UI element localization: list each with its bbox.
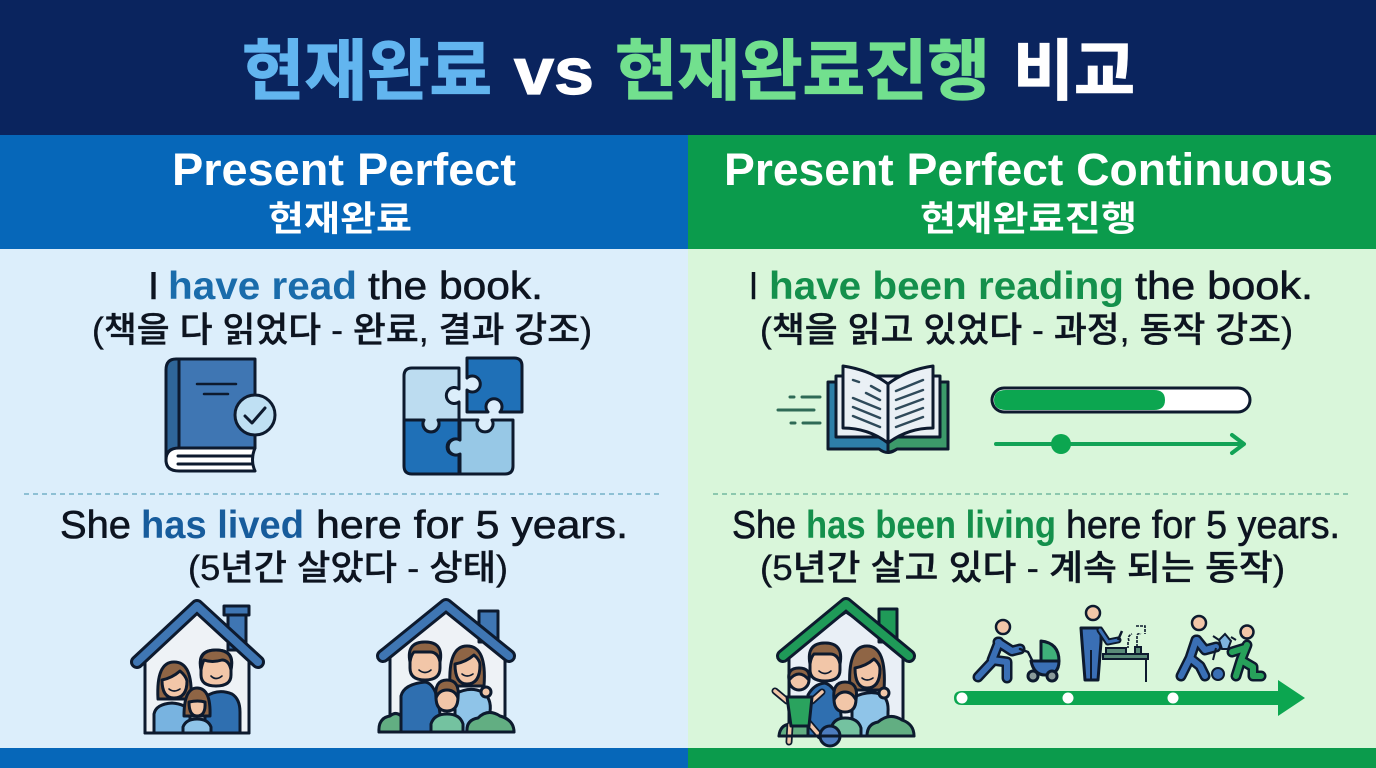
icon: people playing with baby bbox=[1181, 616, 1261, 680]
woman bbox=[450, 646, 484, 686]
example sentence: has been living: here for 5 years. bbox=[1066, 504, 1340, 547]
icon: house with family 1 bbox=[137, 606, 258, 733]
example sentence: have read: the book. bbox=[368, 265, 543, 308]
icon: person cooking bbox=[1081, 606, 1148, 682]
ball bbox=[820, 726, 840, 746]
divider right bbox=[713, 493, 1351, 495]
example sentence: has lived: here for 5 years. bbox=[316, 504, 628, 547]
example sentence: have read bbox=[148, 265, 543, 308]
background: title band bbox=[0, 0, 1376, 135]
korean gloss: have been reading: (책을 읽고 있었다 - 과정, 동작 강조) bbox=[760, 311, 1293, 350]
panel heading: present perfect continuous bbox=[688, 135, 1376, 249]
child bbox=[431, 714, 463, 732]
example sentence: have read: have read bbox=[168, 265, 357, 308]
panel heading: present perfect continuous: 현재완료진행 bbox=[920, 200, 1137, 239]
panel: present perfect continuous background bbox=[688, 249, 1376, 748]
panel heading: present perfect: 현재완료 bbox=[268, 200, 412, 239]
example sentence: has been living: She bbox=[732, 504, 796, 547]
child bbox=[184, 688, 210, 716]
example sentence: have read: I bbox=[148, 265, 159, 308]
timeline arrow with dot bbox=[996, 434, 1244, 454]
example sentence: has been living bbox=[732, 504, 1340, 547]
man bbox=[401, 682, 441, 732]
title: 현재완료진행 bbox=[615, 34, 990, 108]
panel heading: present perfect bbox=[0, 135, 688, 249]
korean gloss: have read: (책을 다 읽었다 - 완료, 결과 강조) bbox=[92, 311, 592, 350]
stroller bbox=[1028, 641, 1059, 681]
example sentence: have been reading: I bbox=[749, 265, 758, 308]
icon: house with family 2 bbox=[379, 605, 514, 732]
panel: present perfect background bbox=[0, 249, 688, 748]
bush bbox=[867, 716, 914, 736]
woman bbox=[850, 646, 884, 690]
title: 비교 bbox=[1013, 34, 1135, 108]
icon: person pushing stroller bbox=[978, 620, 1059, 681]
example sentence: has lived bbox=[60, 504, 628, 547]
korean gloss: has been living: (5년간 살고 있다 - 계속 되는 동작) bbox=[760, 549, 1285, 588]
panel heading: present perfect: Present Perfect bbox=[172, 144, 516, 195]
child bbox=[831, 718, 861, 736]
timeline arrow with milestones bbox=[954, 680, 1305, 716]
example sentence: have been reading bbox=[749, 265, 1313, 308]
panel heading: present perfect continuous: Present Perfect Continuous bbox=[724, 144, 1333, 195]
icon: open book with speed lines bbox=[778, 366, 948, 452]
green kid bbox=[775, 691, 822, 701]
example sentence: have been reading: the book. bbox=[1135, 265, 1313, 308]
footer bar left bbox=[0, 748, 688, 768]
icon: puzzle bbox=[404, 358, 522, 474]
example sentence: have been reading: have been reading bbox=[769, 265, 1124, 308]
footer bar right bbox=[688, 748, 1376, 768]
icon: finished book with check bbox=[166, 359, 275, 471]
example sentence: has lived: She bbox=[60, 504, 131, 547]
woman bbox=[158, 662, 191, 699]
example sentence: has lived: has lived bbox=[141, 504, 304, 547]
book bbox=[828, 366, 948, 452]
example sentence: has been living: has been living bbox=[806, 504, 1056, 547]
man bbox=[808, 683, 842, 736]
divider left bbox=[24, 493, 663, 495]
korean gloss: has lived: (5년간 살았다 - 상태) bbox=[188, 549, 508, 588]
title bbox=[242, 34, 1135, 108]
icon: house with active family bbox=[775, 604, 914, 746]
progress bar bbox=[992, 388, 1250, 412]
speed lines bbox=[778, 397, 820, 423]
title: 현재완료 bbox=[242, 34, 492, 108]
title: vs bbox=[514, 34, 594, 108]
man bbox=[205, 692, 240, 733]
bushes bbox=[379, 714, 401, 732]
